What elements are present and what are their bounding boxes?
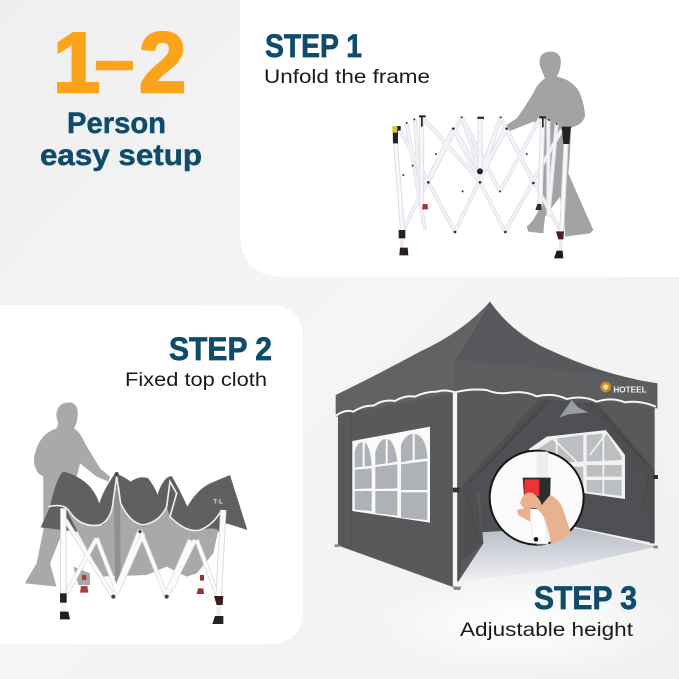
headline: 1-2: –: [95, 21, 134, 99]
right pole: [652, 408, 660, 547]
illustration: step 2 person and covered frame: [25, 403, 247, 624]
panel: step 1: [240, 0, 679, 277]
red button: [524, 479, 539, 496]
step 1 caption: Unfold the frame: [264, 66, 430, 88]
person silhouette: [25, 403, 110, 587]
left wall shaded seam: [349, 410, 352, 550]
pin hole: [534, 537, 538, 542]
headline: person: Person: [67, 107, 166, 140]
step 3 caption: Adjustable height: [460, 619, 634, 641]
tent interior: [463, 397, 655, 543]
rear leg: [73, 567, 90, 585]
person silhouette: [503, 52, 593, 237]
tent floor shadow: [458, 528, 657, 582]
roof ridge line: [455, 302, 490, 360]
callout: height adjuster: [490, 451, 584, 545]
central cloth fold: [114, 487, 121, 587]
front pole: [448, 392, 461, 587]
panel: step 2: [0, 305, 303, 644]
illustration: step 1 person and frame: [392, 52, 593, 258]
hand: [517, 493, 571, 543]
left wall: [336, 392, 457, 588]
right wall left section: [457, 392, 550, 582]
step 3 heading: STEP 3: [534, 580, 637, 616]
pole feet: [335, 544, 658, 590]
rear window: [529, 430, 625, 499]
front pole strap: [453, 488, 459, 492]
cloth edge trim: [48, 477, 222, 531]
top cloth inner: [67, 500, 218, 577]
scalloped trim: [336, 390, 656, 416]
logo: HOTEEL: [613, 386, 647, 395]
left pole: [333, 417, 341, 546]
right wall right section: [597, 402, 655, 470]
headline: 1-2: 2: [139, 16, 186, 111]
zip pull-up tab: [559, 400, 588, 418]
step 2 caption: Fixed top cloth: [125, 369, 267, 391]
right strap: [653, 475, 658, 479]
roof front valance: [455, 360, 657, 408]
top cloth outer: [41, 472, 247, 540]
logo: [600, 382, 647, 395]
headline: easy setup: easy setup: [40, 139, 202, 172]
illustration: step 3 tent: [335, 302, 658, 590]
logo text on cloth: T·L: [213, 499, 223, 505]
folding frame: [392, 115, 571, 258]
adjuster clip: [523, 478, 551, 509]
roof left face: [336, 302, 490, 416]
step 1 heading: STEP 1: [265, 28, 362, 64]
headline: 1-2: 1: [53, 16, 100, 111]
pole in callout: [537, 452, 548, 544]
left window: [352, 427, 430, 523]
inner pole: [529, 508, 548, 543]
step 2 heading: STEP 2: [169, 331, 272, 367]
right door curtain: [583, 402, 655, 543]
background glow: [361, 571, 679, 679]
roof right face: [455, 302, 657, 408]
folding frame: [60, 472, 223, 624]
curtain folds: [467, 398, 650, 535]
left door curtain: [458, 397, 553, 582]
